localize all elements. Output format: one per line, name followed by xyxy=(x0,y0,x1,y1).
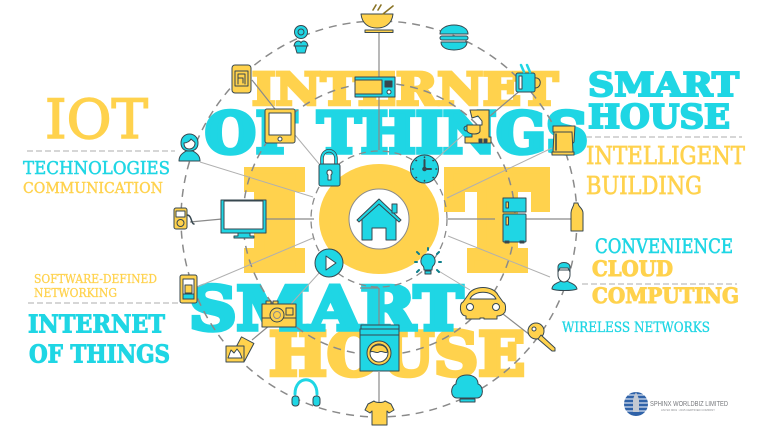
icon: padlock xyxy=(319,151,340,186)
icon: microwave xyxy=(355,77,395,97)
icon: burger xyxy=(440,25,468,50)
left text: COMMUNICATION: COMMUNICATION xyxy=(23,179,163,197)
headline: SMART: SMART xyxy=(189,274,463,344)
icon: circuit phone xyxy=(232,65,251,93)
right text: CONVENIENCE: CONVENIENCE xyxy=(595,234,733,258)
icon: cloud xyxy=(452,375,482,402)
logo: Sphinx Worldbiz Limited: SPHINX WORLDBIZ LIMITED xyxy=(650,401,728,408)
right text: CLOUD COMPUTING: CLOUD xyxy=(592,256,673,281)
headline: HOUSE: HOUSE xyxy=(269,320,525,390)
icon: washing machine xyxy=(360,325,399,371)
headline: big IOT: T xyxy=(452,146,544,299)
icon: headphones xyxy=(292,380,320,406)
left text: IOT: IOT xyxy=(45,88,148,151)
right text: CLOUD COMPUTING xyxy=(592,256,739,308)
icon: person xyxy=(179,134,200,161)
headline: big IOT: O xyxy=(325,146,433,299)
headline: big IOT xyxy=(244,146,550,299)
icon: coffee maker xyxy=(464,110,491,143)
headline: big IOT: I xyxy=(250,146,300,299)
right text: SMART HOUSE: SMART xyxy=(588,65,739,104)
right text: INTELLIGENT BUILDING xyxy=(586,142,745,200)
right text: INTELLIGENT BUILDING: BUILDING xyxy=(586,172,702,200)
headline: INTERNET: INTERNET xyxy=(252,64,558,116)
icon: flower xyxy=(294,26,308,53)
icon: bowl xyxy=(361,5,393,32)
icon: light bulb xyxy=(415,248,441,274)
icon: car xyxy=(460,288,506,319)
icon: picture frames xyxy=(226,337,254,362)
left text: SOFTWARE-DEFINED NETWORKING: SOFTWARE-DEFINED xyxy=(34,271,157,286)
icon: tablet xyxy=(265,109,295,143)
right text: CLOUD COMPUTING: COMPUTING xyxy=(592,283,739,308)
left text: INTERNET OF THINGS: OF THINGS xyxy=(29,340,170,368)
icon: clock xyxy=(410,155,438,183)
icon: smartphone xyxy=(180,275,197,303)
right text: WIRELESS NETWORKS: WIRELESS NETWORKS xyxy=(562,320,710,336)
icon: fridge xyxy=(503,198,526,243)
icon: cup xyxy=(516,65,540,92)
left text: INTERNET OF THINGS: INTERNET xyxy=(28,310,165,338)
icon: house in white circle xyxy=(349,189,409,249)
left text: SOFTWARE-DEFINED NETWORKING: NETWORKING xyxy=(34,285,117,300)
icon: camera xyxy=(262,301,296,327)
headline: OF THINGS: OF THINGS xyxy=(205,100,588,166)
left text: SOFTWARE-DEFINED NETWORKING xyxy=(34,271,157,300)
icon: technician xyxy=(552,262,577,290)
logo: Sphinx Worldbiz Limited: AN ISO 9001 : 2015 CERTIFIED COMPANY xyxy=(661,408,715,412)
logo: Sphinx Worldbiz Limited xyxy=(624,392,728,416)
icon: monitor xyxy=(221,200,266,238)
icon: key xyxy=(528,323,555,351)
icon: kettle xyxy=(552,126,575,155)
icon: music player xyxy=(174,208,194,229)
left text: INTERNET OF THINGS xyxy=(28,310,170,368)
icon: t-shirt xyxy=(365,401,394,425)
right text: SMART HOUSE: HOUSE xyxy=(588,97,730,136)
right text: SMART HOUSE xyxy=(588,65,739,136)
left text: TECHNOLOGIES: TECHNOLOGIES xyxy=(23,158,170,179)
icon: play button xyxy=(315,249,343,277)
icon: bottle xyxy=(571,203,583,231)
